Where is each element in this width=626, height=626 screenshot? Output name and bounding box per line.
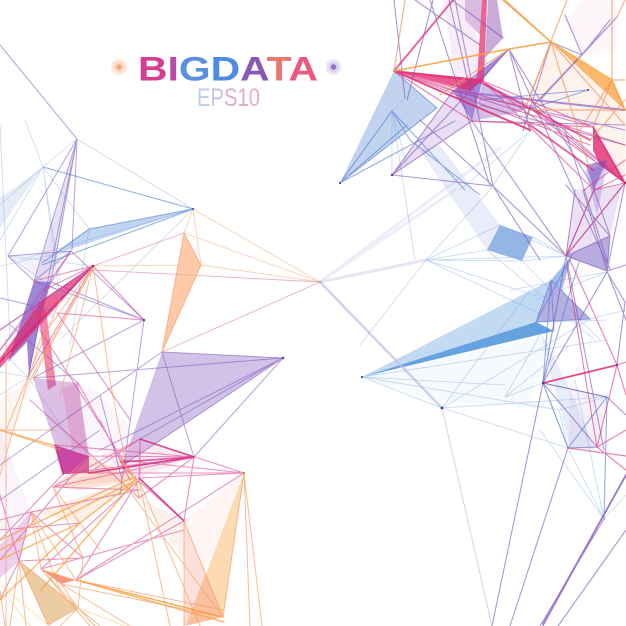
nodes left [92, 208, 321, 474]
blue edges right [340, 71, 607, 519]
panel: left polygon network [0, 45, 321, 626]
purple edges right [392, 0, 626, 626]
title text: BIGDATA [138, 50, 318, 88]
pink spokes to hub [93, 233, 320, 352]
orange edges right [394, 0, 625, 170]
filled facets left [0, 139, 283, 626]
title: BIG DATA wordmark [138, 50, 318, 112]
pale blue edges left [0, 120, 193, 440]
thick purple edge bottom right [453, 91, 626, 624]
subtitle text: EPS10 [197, 84, 260, 112]
thick orange edges left [0, 430, 224, 622]
pale lavender beams from hub [320, 148, 500, 626]
pale orange spokes to hub [93, 209, 320, 282]
strong magenta edges left [0, 266, 194, 521]
icon: purple target [326, 59, 342, 75]
filled facets right [340, 0, 625, 450]
strong pink edges right [394, 0, 625, 383]
nodes right [339, 89, 626, 409]
thick orange edges right [394, 0, 625, 110]
pale blue edges right [360, 98, 626, 519]
yellow edges left [0, 580, 125, 626]
orange edges left [0, 233, 262, 626]
pink edges right [394, 71, 626, 470]
icon: orange target [111, 59, 127, 75]
purple edges left [0, 45, 283, 500]
pink edges left [0, 251, 244, 600]
panel: right polygon network [320, 0, 626, 626]
blue edges left [42, 167, 193, 265]
